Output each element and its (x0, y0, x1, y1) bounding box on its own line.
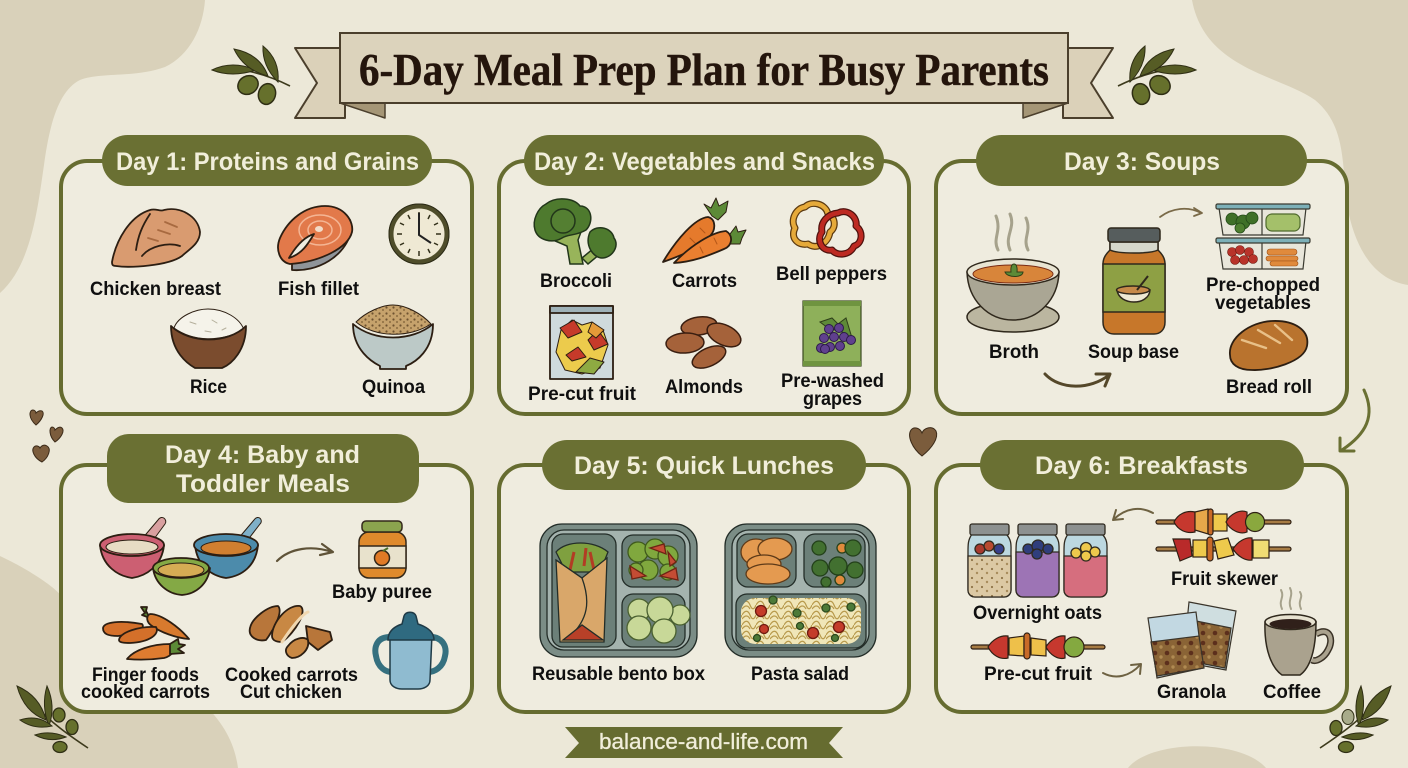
heading: Day 2 (524, 135, 884, 186)
decorative hearts: left (30, 410, 63, 462)
olive branch: bottom left (17, 686, 88, 752)
decorative heart: center (910, 428, 937, 456)
arrow: Day 3 to Day 6 (1340, 390, 1369, 451)
label: Soup base: Soup base (1088, 342, 1179, 363)
icon: grapes bag (803, 301, 861, 366)
icon: coffee mug (1265, 588, 1331, 675)
label: Pre-washed grapes: grapes (803, 389, 862, 410)
label: Finger foods cooked carrots: Finger foods (92, 665, 199, 686)
panel: Day 4 (61, 434, 472, 712)
icon: soup bowl with steam (967, 214, 1059, 332)
icon: bell peppers (793, 203, 861, 254)
heading: Day 2: Day 2: Vegetables and Snacks (534, 148, 875, 176)
arrow: fruit to granola (1103, 664, 1141, 676)
heading: Day 4 (107, 434, 419, 503)
background blob: top right (1192, 0, 1408, 285)
arrow: skewer to oats (1113, 509, 1153, 520)
label: Carrots: Carrots (672, 271, 737, 292)
heading: Day 3: Day 3: Soups (1064, 148, 1220, 176)
label: Coffee: Coffee (1263, 682, 1321, 703)
icon: fruit skewers (1156, 509, 1291, 561)
icon: granola bags (1148, 602, 1236, 678)
label: Broccoli: Broccoli (540, 271, 612, 292)
heading: Day 6 (980, 440, 1304, 490)
panel: Day 2 (499, 135, 909, 414)
footer text: balance-and-life.com (599, 729, 808, 754)
heading: Day 3 (976, 135, 1307, 186)
footer ribbon (565, 727, 843, 758)
heading: Day 1 (102, 135, 432, 186)
heading: Day 4: Toddler Meals (176, 470, 350, 498)
label: Rice: Rice (190, 377, 227, 398)
olive branch: bottom right (1320, 686, 1391, 752)
label: Pasta salad: Pasta salad (751, 664, 849, 685)
background blob: top left (0, 0, 205, 293)
label: Pre-washed grapes: Pre-washed (781, 371, 884, 392)
label: Fish fillet: Fish fillet (278, 279, 360, 300)
label: Quinoa: Quinoa (362, 377, 425, 398)
icon: pre-cut fruit bag (550, 306, 613, 379)
label: Broth: Broth (989, 342, 1039, 363)
label: Bell peppers: Bell peppers (776, 264, 887, 285)
label: Pre-chopped vegetables: vegetables (1215, 293, 1311, 314)
label: Pre-washed grapes (781, 371, 884, 410)
icon: bread roll (1230, 321, 1307, 370)
arrow: broth to soup base (1045, 374, 1110, 386)
label: Chicken breast: Chicken breast (90, 279, 222, 300)
label: Pre-cut fruit (Day 6): Pre-cut fruit (984, 664, 1093, 685)
label: Cooked carrots Cut chicken: Cut chicken (240, 682, 342, 703)
heading: Day 1: Day 1: Proteins and Grains (116, 148, 419, 176)
background blob: bottom center (1128, 746, 1266, 768)
label: Finger foods cooked carrots: cooked carrots (81, 682, 210, 703)
background blob: bottom left (0, 556, 238, 768)
label: Almonds: Almonds (665, 377, 743, 398)
label: Overnight oats: Overnight oats (973, 603, 1102, 624)
icon: quinoa bowl (353, 305, 433, 369)
icon: chicken breast (112, 209, 200, 267)
icon: baby food bowls (100, 517, 261, 595)
icon: pre-chopped vegetable containers (1216, 204, 1310, 269)
icon: rice bowl (171, 309, 246, 368)
olive branch: top left (212, 46, 290, 106)
icon: almonds (666, 315, 745, 373)
panel: Day 1 (61, 135, 472, 414)
title text: 6-Day Meal Prep Plan for Busy Parents (359, 44, 1049, 95)
icon: soup base jar (1103, 228, 1165, 334)
title banner (295, 33, 1113, 118)
arrow: bowls to baby puree (277, 544, 333, 561)
label: Fruit skewer: Fruit skewer (1171, 569, 1279, 590)
heading: Day 4: Day 4: Baby and (165, 441, 360, 469)
icon: pre-cut fruit skewer (971, 633, 1105, 659)
label: Baby puree: Baby puree (332, 582, 432, 603)
icon: carrots (663, 198, 746, 263)
label: Pre-chopped vegetables (1206, 275, 1320, 314)
label: Reusable bento box: Reusable bento box (532, 664, 705, 685)
icon: fish fillet (278, 206, 352, 270)
panel: Day 3 (936, 135, 1347, 414)
icon: baby puree jar (359, 521, 406, 578)
icon: finger food carrots (103, 607, 189, 660)
heading: Day 6: Day 6: Breakfasts (1035, 452, 1248, 480)
icon: clock (389, 204, 449, 264)
heading: Day 5 (542, 440, 866, 490)
heading: Day 5: Day 5: Quick Lunches (574, 452, 834, 480)
label: Bread roll: Bread roll (1226, 377, 1312, 398)
label: Granola: Granola (1157, 682, 1226, 703)
icon: broccoli (534, 199, 616, 264)
label: Cooked carrots Cut chicken: Cooked carrots (225, 665, 358, 686)
icon: overnight oat jars (968, 524, 1107, 597)
icon: pasta salad bento box (725, 524, 876, 657)
panel: Day 5 (499, 440, 909, 712)
icon: reusable bento box (540, 524, 697, 657)
icon: sippy cup (375, 612, 446, 689)
label: Cooked carrots Cut chicken (225, 665, 358, 703)
panel: Day 6 (936, 440, 1347, 712)
label: Pre-chopped vegetables: Pre-chopped (1206, 275, 1320, 296)
olive branch: top right (1118, 46, 1196, 106)
label: Finger foods cooked carrots (81, 665, 210, 703)
label: Pre-cut fruit (Day 2): Pre-cut fruit (528, 384, 637, 405)
arrow: soup base to vegetables (1160, 208, 1202, 217)
icon: cut chicken (250, 606, 332, 658)
